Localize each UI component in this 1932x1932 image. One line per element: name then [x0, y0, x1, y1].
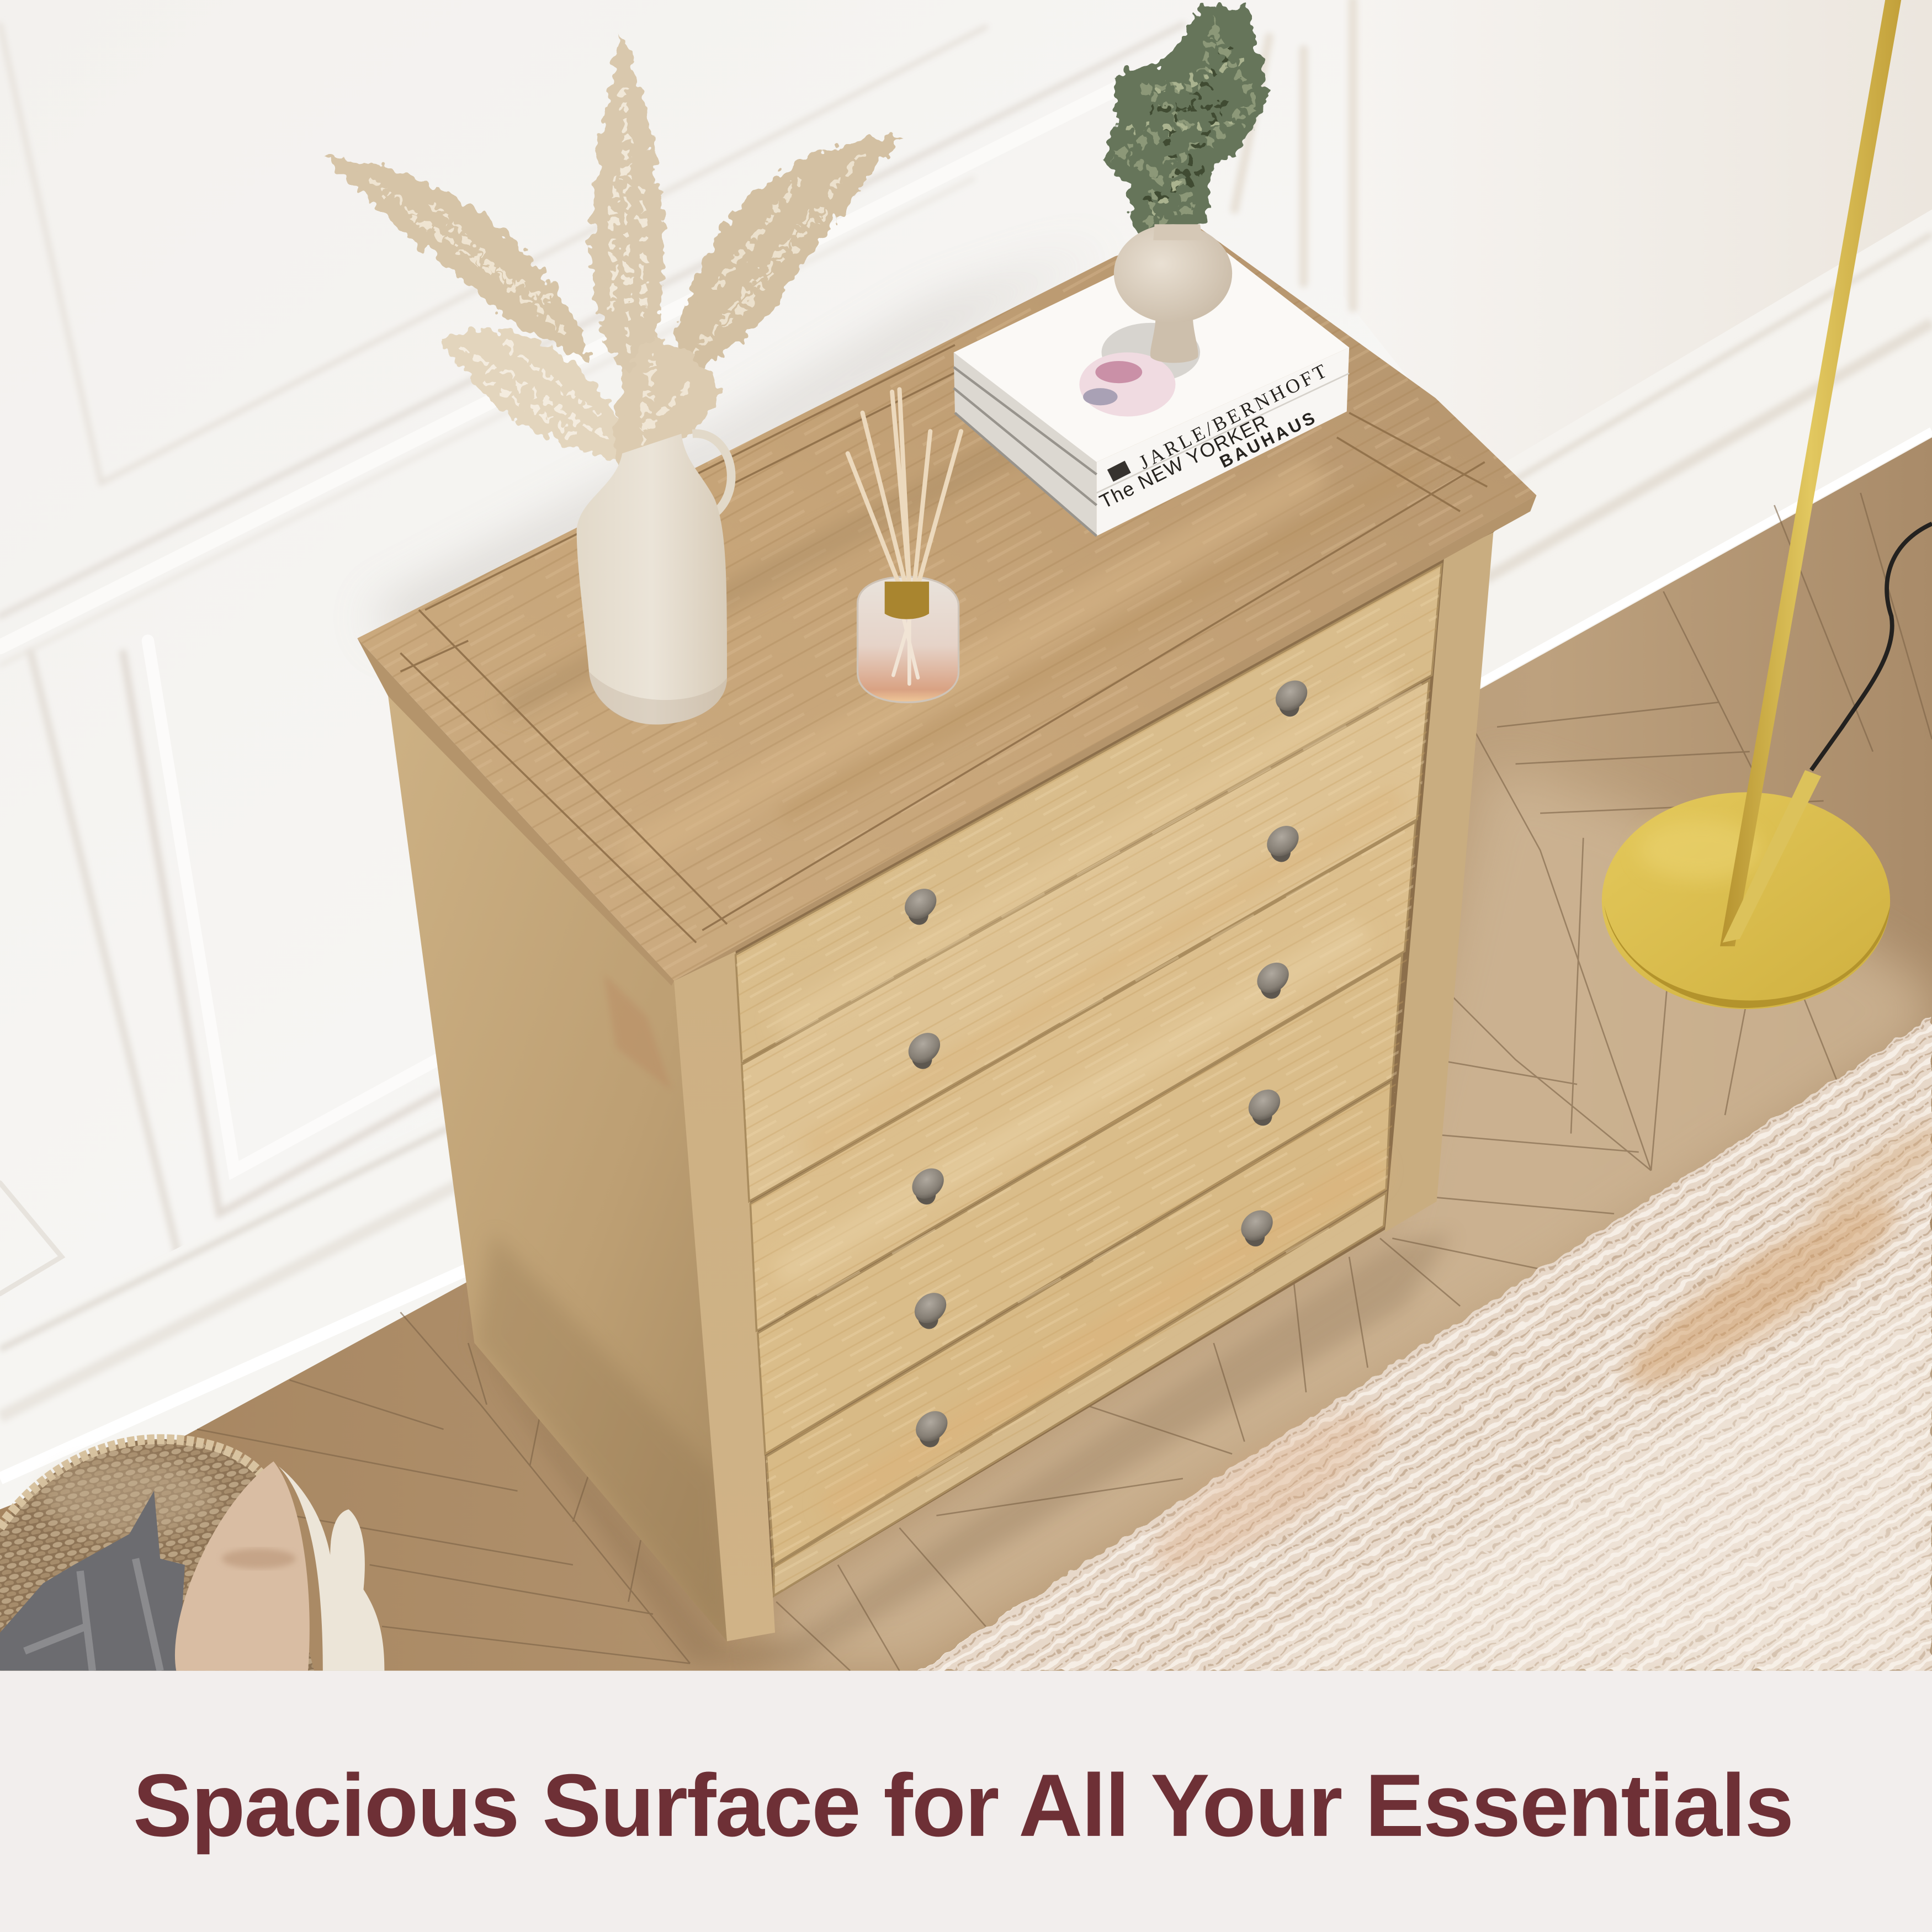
plume centre — [597, 52, 659, 376]
dresser front leg — [674, 951, 775, 1641]
pillow — [175, 1461, 310, 1671]
grey cloth — [0, 1491, 185, 1671]
plume right — [675, 142, 890, 382]
vase globe — [1114, 224, 1232, 323]
wall mouldings — [0, 0, 1353, 1349]
vase handle — [692, 433, 731, 518]
book spine titles — [1096, 360, 1330, 513]
greenery — [1103, 2, 1269, 243]
rug — [918, 1017, 1932, 1671]
book spine titles: The NEW YORKER — [1096, 411, 1271, 513]
baseboard right — [1479, 209, 1932, 690]
floor lamp — [1602, 0, 1932, 1009]
plume lower left — [450, 335, 614, 453]
drawer fronts — [736, 564, 1442, 1596]
drawer 1 — [736, 564, 1442, 1062]
stack of books — [954, 233, 1349, 536]
vase foot — [1150, 314, 1198, 363]
title: Spacious Surface for All Your Essentials — [133, 1756, 1794, 1855]
vase — [577, 434, 727, 724]
glass bottle — [858, 577, 959, 702]
dresser carcass — [674, 495, 1536, 1641]
reed diffuser — [848, 389, 961, 702]
woven basket — [0, 1439, 384, 1671]
pampas grass in vase — [339, 52, 890, 724]
wall shadow behind dresser — [370, 246, 1109, 641]
dresser left side — [388, 696, 727, 1641]
drawer knobs — [899, 674, 1313, 1451]
small vase with greenery — [1103, 2, 1269, 363]
reeds — [848, 389, 961, 684]
drawer 3 — [750, 822, 1416, 1331]
plume lower right — [619, 343, 715, 462]
dresser top — [357, 229, 1536, 986]
light planks near rug — [776, 764, 1932, 1671]
baseboard left — [0, 1109, 468, 1503]
dresser right leg — [1385, 532, 1493, 1232]
lamp cord — [1811, 524, 1932, 770]
book cover circles — [1102, 323, 1200, 382]
basket rim and handle — [278, 1466, 384, 1671]
bottom caption band — [0, 1671, 1932, 1932]
book spine titles: BAUHAUS — [1217, 408, 1318, 471]
lamp pole — [1720, 0, 1901, 946]
lamp base — [1602, 792, 1890, 1009]
drawer 2 — [742, 680, 1429, 1201]
drawer 5 — [766, 1082, 1391, 1565]
plume left — [339, 164, 582, 351]
dresser — [357, 229, 1536, 1663]
drawer 4 — [758, 955, 1402, 1454]
floor — [0, 437, 1932, 1671]
base rail — [774, 1193, 1386, 1596]
dresser shadow on floor — [474, 1232, 1454, 1663]
gold collar — [885, 582, 929, 619]
book spine titles: JARLE/BERNHOFT — [1135, 360, 1330, 474]
drawer wood streaks — [789, 690, 1392, 1503]
